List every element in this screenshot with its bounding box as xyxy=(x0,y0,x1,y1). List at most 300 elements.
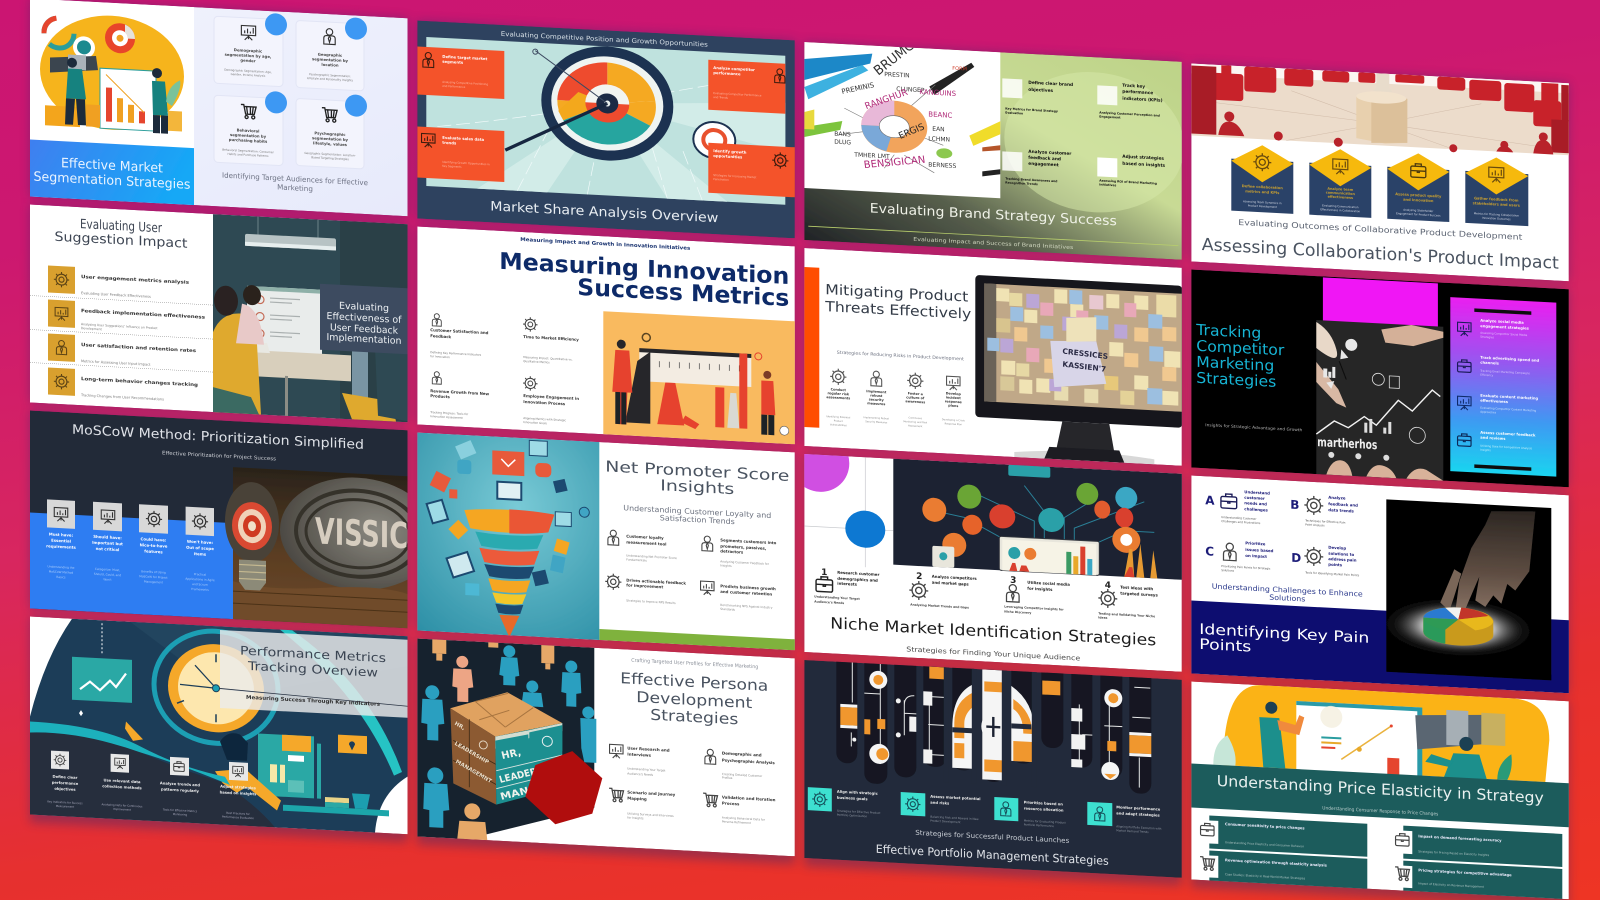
subtitle: Identifying Target Audiences for Effective xyxy=(222,171,369,187)
item text: Metrics for Evaluating Product xyxy=(1024,819,1067,825)
item text: for insights xyxy=(1027,586,1053,592)
card text xyxy=(1242,184,1283,209)
icon xyxy=(48,299,75,328)
item text: Important but xyxy=(92,540,123,546)
item text: Best Practices for xyxy=(226,811,251,816)
callout text: opportunities xyxy=(713,153,743,160)
handwritten words: ERGIS xyxy=(897,122,927,142)
item text: Measurement xyxy=(56,804,74,809)
item text: response xyxy=(945,399,963,404)
photo: team meeting xyxy=(213,214,408,422)
sign word: VISSIC xyxy=(315,511,408,557)
card text xyxy=(307,51,354,82)
title xyxy=(1199,621,1369,662)
item text xyxy=(1418,834,1502,858)
icon xyxy=(1087,802,1112,826)
callout text xyxy=(713,148,756,183)
handwritten words: BEANC xyxy=(928,111,953,120)
card: analyze team communication xyxy=(1309,148,1371,218)
item text: Adjust strategies xyxy=(220,784,257,790)
subtitle: Strategies for Reducing Risks in Product Development xyxy=(837,350,964,362)
item text: Analyze customer xyxy=(1028,149,1072,157)
lower dark band with teal swoosh xyxy=(30,722,275,827)
callout text: segments xyxy=(442,59,464,65)
card text: location xyxy=(321,62,339,68)
item text: and reviews xyxy=(1480,436,1506,441)
chalk text: martherhos xyxy=(1317,434,1377,452)
illustration: target with arrow xyxy=(426,37,785,205)
callout: evaluate sales data xyxy=(417,126,504,182)
item text: Frameworks xyxy=(191,587,209,592)
photo: hand touching pie chart xyxy=(1386,499,1551,680)
item text: Products xyxy=(430,393,450,399)
cube words: HR, xyxy=(500,747,522,762)
letter: C xyxy=(1205,544,1214,559)
item: monitor performance xyxy=(1087,802,1162,835)
item text: Monitor performance xyxy=(1116,805,1161,812)
item text xyxy=(722,750,775,782)
item text: Mapping xyxy=(627,796,647,802)
title xyxy=(34,158,190,190)
title: Assessing Collaboration's Product Impact xyxy=(1202,235,1559,274)
item text xyxy=(1480,394,1539,417)
subtitle: Evaluating Competitive Position and Growth Opportunities xyxy=(501,30,709,49)
slide: Net Promoter Score Insights xyxy=(417,432,795,652)
illustration: connected icons and laptop xyxy=(893,459,1182,580)
item text: Analyze competitors xyxy=(932,574,977,581)
callout: define target segments xyxy=(417,46,504,99)
item text: Track advertising spend and xyxy=(1480,356,1539,363)
item text: Strategies for Pricing Based on Elasticity Insights xyxy=(1418,849,1490,857)
item text: Analyze social media xyxy=(1480,319,1524,325)
item: resource allocation xyxy=(994,797,1067,829)
item text: Qualitative Metrics xyxy=(523,359,550,364)
item text: for Innovation xyxy=(430,354,450,359)
item text: Develop xyxy=(1328,545,1346,551)
callout text: Strategies for Increasing Market xyxy=(713,173,756,179)
slide: Effective Persona Development Strategies xyxy=(417,638,795,856)
item text: Case Studies: Elasticity in Real-World Market Strategies xyxy=(1225,872,1306,880)
title xyxy=(620,669,768,730)
item text xyxy=(1480,431,1536,455)
item text: Research customer xyxy=(837,570,879,577)
item text: Initiatives xyxy=(1099,182,1117,187)
item text: Audience's Needs xyxy=(627,772,653,777)
handwritten words: TMHER LMT xyxy=(853,152,890,160)
card text: Engagement for Product Success xyxy=(1396,211,1441,218)
icon xyxy=(47,499,75,529)
card text: Lifestyle and Personality Insights xyxy=(307,76,354,82)
item: segments xyxy=(702,536,777,570)
item text xyxy=(185,539,215,592)
title: Marketing xyxy=(1196,353,1274,375)
title band xyxy=(1191,600,1569,693)
photo: chalkboard analysis xyxy=(1316,320,1443,481)
card: behavioral xyxy=(214,88,287,166)
title: Understanding Price Elasticity in Strategy xyxy=(1217,772,1544,807)
icon xyxy=(1006,584,1019,602)
item text: Tracking Changes from User Recommendations xyxy=(80,393,164,402)
bar xyxy=(1209,850,1367,891)
icon xyxy=(871,371,882,386)
title: Measuring Innovation xyxy=(499,249,789,290)
item text: data trends xyxy=(1328,507,1355,514)
handwritten words: KANGUINS xyxy=(919,88,957,98)
item text: Test ideas with xyxy=(1120,585,1153,591)
item text: Market Demand Trends xyxy=(1116,828,1149,834)
icon xyxy=(186,507,214,536)
title: Strategies xyxy=(650,706,739,728)
item text: Monitoring and Risk xyxy=(903,420,928,424)
item text: resource allocation xyxy=(1024,807,1064,813)
item text: Aligning Metrics with Strategic xyxy=(523,416,566,422)
icon xyxy=(907,372,923,389)
item: customer satisfaction xyxy=(430,313,489,361)
item text: Won't have: xyxy=(187,539,213,545)
icon xyxy=(1458,434,1471,446)
item text: indicators (KPIs) xyxy=(1122,96,1163,104)
handwritten words xyxy=(834,47,966,168)
item text: Analyzing Data for Continuous xyxy=(102,802,143,808)
item text xyxy=(626,577,686,606)
item: validation xyxy=(703,793,776,826)
icon xyxy=(1304,546,1323,566)
item text: objectives xyxy=(1028,87,1053,94)
card text: segmentation by age, xyxy=(225,52,272,59)
item text xyxy=(1024,801,1067,829)
item text: Psychographic Analysis xyxy=(722,757,775,765)
item text: Innovation Process xyxy=(523,399,566,406)
item 2: analyze competitors xyxy=(909,572,977,610)
item text: Analyzing Behavioral Data for xyxy=(722,815,766,822)
cube words: MANAGE xyxy=(499,780,555,803)
icon xyxy=(605,573,621,590)
card: demographic xyxy=(214,10,287,87)
card text xyxy=(224,47,272,78)
item text: Analyzing Market Trends and Gaps xyxy=(910,603,969,610)
item text: Solutions xyxy=(1221,568,1235,573)
icon xyxy=(1221,494,1237,509)
icon xyxy=(1396,833,1409,846)
subtitle: Effective Prioritization for Project Success xyxy=(162,450,276,462)
subtitle: Insights for Strategic Advantage and Growth xyxy=(1205,422,1303,432)
item text: address pain xyxy=(1328,556,1357,563)
item: align with goals xyxy=(808,787,881,819)
icon xyxy=(901,792,925,816)
subtitle: Understanding Challenges to Enhance xyxy=(1212,582,1363,599)
title: Net Promoter Score xyxy=(605,457,789,485)
subtitle xyxy=(1212,582,1363,607)
icon xyxy=(772,152,788,169)
item: loyalty tool xyxy=(608,530,677,564)
card text xyxy=(1320,186,1361,213)
subtitle xyxy=(222,172,368,193)
item text: on impact xyxy=(1245,553,1267,559)
item text: Tracking Progress: Tools for xyxy=(429,410,469,416)
item text xyxy=(220,784,257,820)
subtitle: Evaluating Outcomes of Collaborative Product Development xyxy=(1238,218,1522,242)
item text: Engagement xyxy=(1099,114,1121,120)
item text: Conduct xyxy=(831,387,846,392)
item text: Utilizing Data for Competitive Analysis xyxy=(1480,444,1533,450)
item text xyxy=(1099,152,1166,190)
item text: Leveraging Competitor Insights for xyxy=(1004,604,1064,612)
callout: identify growth opportunities xyxy=(708,143,795,197)
subtitle: Strategies for Finding Your Unique Audience xyxy=(906,645,1080,662)
card text xyxy=(1395,192,1442,218)
item text: Validation and Iteration xyxy=(722,794,776,802)
icon xyxy=(93,502,122,531)
illustration: analysts with telescope and chart xyxy=(40,12,184,135)
decorative circles xyxy=(789,430,893,569)
icon xyxy=(1098,588,1117,608)
icon xyxy=(423,52,434,68)
item text: MoSCoW Method xyxy=(49,569,73,575)
item: employee engagement xyxy=(523,376,579,427)
item: must have xyxy=(46,499,76,580)
title: Segmentation Strategies xyxy=(33,170,191,193)
icon xyxy=(229,762,248,781)
card: gather feedback xyxy=(1465,156,1528,226)
icon xyxy=(170,757,189,776)
handwritten words: EAN xyxy=(932,126,945,133)
slide: Assessing Collaboration's Product Impact xyxy=(1191,64,1569,281)
icon xyxy=(609,788,624,802)
item text: Understanding Price Elasticity and Consumer Behavior xyxy=(1225,840,1305,848)
item text: measures xyxy=(867,401,885,406)
item text: Predicts business growth xyxy=(720,583,776,591)
subtitle xyxy=(623,503,772,528)
item: response plans xyxy=(942,376,966,426)
photo: figures and HR cube xyxy=(417,638,602,846)
item text: Evaluate content marketing xyxy=(1480,394,1539,401)
item text: interests xyxy=(837,581,858,587)
card text: Demographic Segmentation: Age, xyxy=(224,68,272,74)
item text: issues based xyxy=(1245,547,1274,553)
item text: Prioritize xyxy=(1245,540,1266,546)
item text xyxy=(430,327,489,361)
item text: objectives xyxy=(54,787,76,792)
item text xyxy=(81,308,205,337)
item text: security xyxy=(869,397,885,402)
item text: Categorize: Must, xyxy=(95,567,120,572)
item text: solutions to xyxy=(1328,551,1355,557)
title: Competitor xyxy=(1196,337,1285,359)
item text: Basics xyxy=(56,575,66,579)
item text: Develop xyxy=(946,391,961,396)
item 4: test ideas xyxy=(1098,580,1158,623)
card text: Evaluating Communication xyxy=(1322,203,1359,209)
card: geographic xyxy=(296,14,367,91)
item text: Standards xyxy=(720,607,735,612)
item text: Key Indicators for Success xyxy=(47,799,83,805)
item text xyxy=(910,573,977,610)
card text: gender xyxy=(240,58,256,63)
callout text: Penetration xyxy=(713,177,729,182)
title panel xyxy=(30,140,194,208)
item text xyxy=(523,393,579,427)
item text: promoters, passives, xyxy=(720,543,767,551)
item: revenue growth xyxy=(429,371,490,421)
callout text: performance xyxy=(713,70,741,76)
item text xyxy=(627,746,670,778)
item text: Implement xyxy=(866,389,887,394)
illustration: funnel and app icons xyxy=(417,432,599,642)
icon xyxy=(1458,322,1471,336)
card text: Based Targeting Strategies xyxy=(311,155,349,161)
icon xyxy=(432,313,441,326)
handwritten words: BANS xyxy=(834,131,851,138)
subtitle: Measuring Success Through Key Indicators xyxy=(246,695,380,708)
item text: Assessment xyxy=(908,424,923,428)
title: Effective Market xyxy=(61,156,163,176)
photo: figures and HR cube: LEADERSHIP xyxy=(453,741,490,766)
item text xyxy=(139,536,169,585)
icon xyxy=(702,536,713,551)
item text: Understanding Your Target xyxy=(627,767,666,773)
item text xyxy=(1225,858,1328,882)
item text: detractors xyxy=(720,548,744,555)
icon: figure xyxy=(324,28,335,45)
item text: Insights xyxy=(720,563,732,568)
item text: Foster a xyxy=(908,391,923,396)
item text xyxy=(1480,319,1530,341)
item text: Analyze trends and xyxy=(160,781,200,787)
slide: MoSCoW Method xyxy=(30,410,436,630)
item text: and adapt strategies xyxy=(1116,811,1161,818)
item text xyxy=(722,794,776,826)
card text: communication xyxy=(1326,191,1355,196)
item text xyxy=(46,531,76,580)
item text xyxy=(1116,805,1162,835)
item text: Prioritizing Pain Points for Strategic xyxy=(1221,564,1271,571)
icon xyxy=(48,265,75,294)
item text: Evaluating User Feedback Effectiveness xyxy=(81,291,151,299)
item text: Prioritize based on xyxy=(1024,801,1063,807)
item: relevant data xyxy=(102,753,143,812)
title: Points xyxy=(1199,636,1251,656)
handwritten words: PREMINIS xyxy=(841,81,876,96)
item text: Assessing ROI of Brand Marketing xyxy=(1099,178,1157,185)
callout text: and Trends xyxy=(713,95,729,100)
icon xyxy=(432,371,441,384)
card text: Behavioral xyxy=(237,127,259,134)
letter: A xyxy=(1205,493,1215,508)
subtitle: Measuring Impact and Growth in Innovation Initiatives xyxy=(520,237,690,252)
item: conduct assessments xyxy=(826,368,851,427)
item text: Revenue optimization through elasticity analysis xyxy=(1225,858,1328,868)
item text xyxy=(1098,583,1158,623)
title xyxy=(824,282,971,323)
card text: metrics and KPIs xyxy=(1245,189,1279,195)
item text xyxy=(720,537,777,570)
slide: Effective Market Segmentation Strategies xyxy=(30,0,408,219)
subtitle: Crafting Targeted User Profiles for Effective Marketing xyxy=(631,658,758,670)
title: Insights xyxy=(660,476,735,498)
item text: not critical xyxy=(96,546,119,552)
handwritten words: FORM xyxy=(952,66,967,73)
item text: features xyxy=(144,548,163,554)
item text: Interviews xyxy=(627,752,652,758)
photo: wooden piece with red cylinders xyxy=(1191,64,1569,159)
icon xyxy=(1333,159,1348,175)
icon xyxy=(816,576,833,592)
icon xyxy=(1200,857,1214,871)
item text: Scenario and Journey xyxy=(627,790,676,797)
item text xyxy=(523,334,579,366)
item text: Ideas xyxy=(1098,615,1108,620)
item: define objectives xyxy=(47,750,83,809)
handwritten words: BRUMG xyxy=(871,38,918,79)
card text: segmentation by xyxy=(312,56,349,63)
item: scenario mapping xyxy=(609,788,676,822)
item: analyze customer feedback xyxy=(1002,147,1072,188)
item text: Utilizing Surveys and Interviews xyxy=(627,812,674,818)
item text: Testing and Validating Your Niche xyxy=(1098,611,1155,618)
bar xyxy=(1209,815,1367,857)
illustration: team at chart with telescope xyxy=(1213,683,1549,784)
title: Effective Persona xyxy=(620,669,768,695)
item text: Challenges and Frustrations xyxy=(1221,519,1261,525)
item text: Assessing Competitor Social Media xyxy=(1480,331,1528,337)
icon: cart xyxy=(322,108,337,122)
subtitle: Strategies for Successful Product Launches xyxy=(915,829,1070,845)
icon xyxy=(1201,823,1214,836)
item text: Tools for Effective Metrics xyxy=(162,807,198,813)
item text: Understanding Customer xyxy=(1221,515,1257,521)
item text: Creating Detailed Customer xyxy=(722,772,763,778)
item: define brand objectives xyxy=(1002,78,1073,118)
slide: Market Share Analysis Overview xyxy=(417,20,795,238)
item text: plans xyxy=(948,404,958,408)
item text xyxy=(1221,539,1274,575)
title: Strategies xyxy=(1196,369,1276,391)
item: could have xyxy=(139,504,169,585)
icon xyxy=(830,368,846,385)
item: behavior changes xyxy=(48,367,198,403)
item text: assessments xyxy=(826,395,850,400)
item text: Insights xyxy=(1480,448,1491,452)
item: revenue optimization xyxy=(1200,850,1367,891)
item text: Won't xyxy=(103,577,112,582)
item text: Strategies to Improve NPS Results xyxy=(626,598,676,605)
item text: customer xyxy=(1244,495,1265,501)
item: implementation effectiveness xyxy=(48,299,205,337)
item text: incident xyxy=(946,395,961,400)
card: define collaboration metrics xyxy=(1231,144,1293,214)
icon xyxy=(139,504,168,534)
callout text: Analyze competitor xyxy=(713,65,755,72)
subtitle: Marketing xyxy=(277,182,313,193)
app icons xyxy=(427,435,589,602)
item: market potential xyxy=(901,792,981,825)
item: adjust strategies xyxy=(220,761,257,820)
card text: effectiveness xyxy=(1328,195,1353,200)
card text: Product Development xyxy=(1248,203,1277,209)
item text xyxy=(92,534,123,582)
bar xyxy=(1403,861,1562,900)
item text xyxy=(81,274,189,301)
item: satisfaction rates xyxy=(48,333,196,369)
item text: for Insights xyxy=(627,816,644,820)
callout text: Identifying Growth Opportunities in xyxy=(442,160,490,166)
item text: Management xyxy=(144,579,164,585)
card text: segmentation by xyxy=(230,132,267,139)
item text: collection methods xyxy=(102,784,143,790)
slide: Performance Metrics Tracking Overview xyxy=(30,616,408,834)
title: Success Metrics xyxy=(577,275,789,312)
cube words xyxy=(498,746,561,806)
